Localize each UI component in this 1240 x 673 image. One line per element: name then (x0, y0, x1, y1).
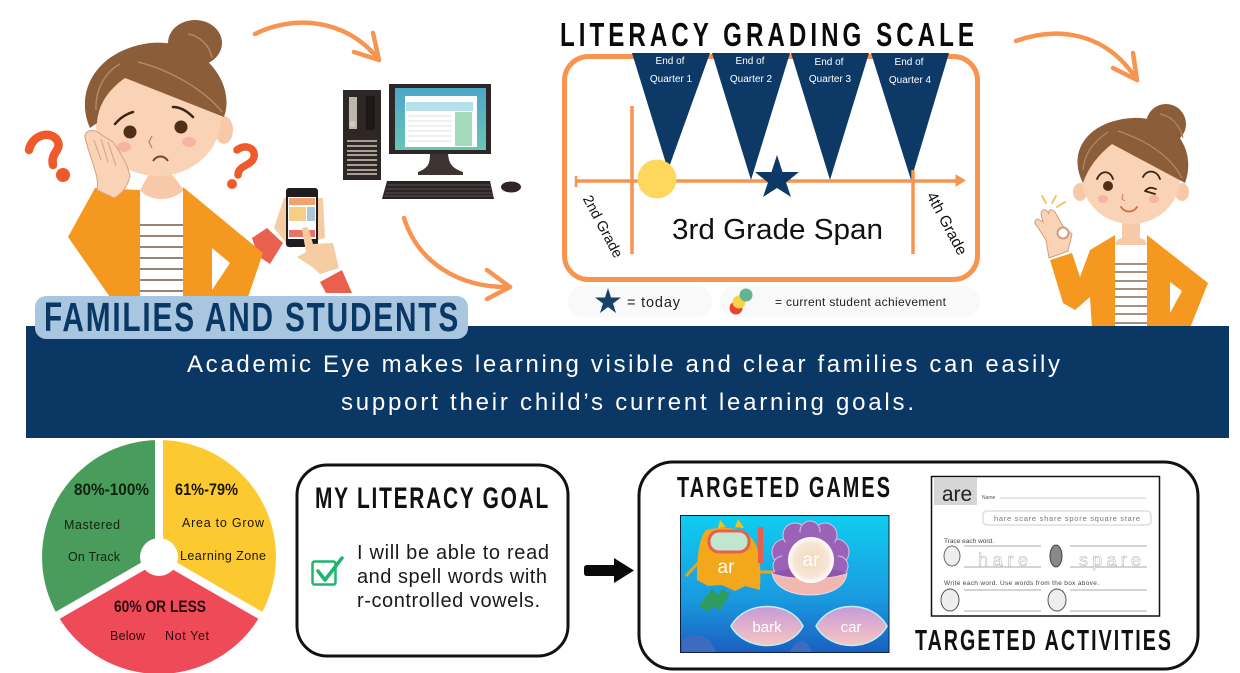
icon: green check box (312, 558, 342, 584)
quarter 2 pennant (712, 53, 790, 180)
illustration: phone in hands (274, 188, 352, 293)
hand on cheek (85, 130, 130, 198)
quarter 3 pennant: End of (815, 57, 844, 68)
OK hand gesture (1035, 196, 1072, 258)
legend: today (568, 286, 712, 317)
panel: targeted resources (639, 462, 1198, 669)
label: learning zone: Learning Zone (180, 549, 266, 563)
legend: current student achievement: = current student achievement (775, 295, 947, 309)
monster diver: ar (718, 557, 735, 578)
heading: targeted games: TARGETED GAMES (677, 472, 892, 504)
head (1073, 104, 1189, 224)
label: mastered: Mastered (64, 518, 120, 532)
quarter 1 pennant: Quarter 1 (650, 74, 693, 85)
illustration: worried parent (29, 20, 283, 300)
top clam with pearl: ar (803, 550, 820, 571)
label: 60 percent or less: 60% OR LESS (114, 597, 206, 616)
label: not yet: Not Yet (165, 629, 210, 643)
goal text: I will be able to read (357, 542, 549, 564)
clam: car (816, 606, 887, 646)
banner: key message (26, 326, 1229, 438)
game screenshot (680, 516, 889, 652)
worksheet (932, 476, 1160, 616)
quarter 4 pennant: Quarter 4 (889, 75, 932, 86)
worksheet: hare (978, 550, 1028, 570)
label: 80 to 100 percent: 80%-100% (74, 480, 149, 499)
coral (682, 635, 812, 652)
heading: my literacy goal: MY LITERACY GOAL (315, 482, 550, 515)
yellow sector (159, 440, 276, 616)
arrow: goal to resources (584, 558, 634, 583)
legend: today: = today (627, 295, 681, 311)
keyboard (382, 181, 494, 199)
label: 2nd grade: 2nd Grade (579, 193, 625, 261)
arrow: grading scale to happy parent (1016, 34, 1137, 80)
body (68, 172, 283, 300)
worksheet: are (942, 483, 972, 506)
label: 61 to 79 percent: 61%-79% (175, 480, 238, 499)
arrow: parent to computer (255, 23, 379, 60)
banner text line 2: support their child’s current learning goals. (341, 389, 914, 416)
quarter 2 pennant: Quarter 2 (730, 74, 773, 85)
illustration: happy parent (1035, 104, 1208, 328)
tower (343, 90, 381, 180)
timeline axis (576, 106, 965, 254)
quarter 1 pennant (632, 53, 710, 170)
quarter 4 pennant (871, 53, 949, 180)
monster diver (686, 519, 778, 612)
worksheet: Write each word. Use words from the box above. (944, 580, 1099, 587)
quarter 3 pennant (791, 53, 869, 180)
goal text: and spell words with (357, 566, 547, 588)
banner text line 1: Academic Eye makes learning visible and clear families can easily (187, 351, 1060, 378)
illustration: desktop computer (343, 84, 521, 199)
label: 3rd grade span: 3rd Grade Span (672, 214, 883, 246)
goal text (357, 542, 549, 612)
today star (755, 155, 799, 197)
label: on track: On Track (68, 550, 121, 564)
clam: bark (731, 606, 803, 646)
heading: literacy grading scale: LITERACY GRADING SCALE (560, 16, 978, 53)
panel: my literacy goal (297, 465, 568, 656)
quarter 2 pennant: End of (736, 56, 765, 67)
quarter 1 pennant: End of (656, 56, 685, 67)
label: area to grow: Area to Grow (182, 516, 265, 530)
worksheet: Trace each word. (944, 538, 994, 545)
quarter 3 pennant: Quarter 3 (809, 74, 852, 85)
body (1050, 218, 1208, 328)
label: 4th grade: 4th Grade (923, 189, 970, 258)
red sector (58, 557, 260, 673)
worksheet: hare scare share spore square stare (994, 514, 1140, 523)
legend: current student achievement (720, 286, 980, 317)
current achievement marker (638, 160, 676, 198)
head (85, 20, 233, 176)
top clam with pearl (772, 521, 849, 595)
arrow: computer to grading scale (404, 218, 510, 299)
chart: score pie (42, 439, 276, 673)
worksheet: spare (1079, 550, 1141, 570)
worksheet: Name (982, 495, 996, 501)
left question mark (29, 135, 66, 178)
chart: literacy grading scale timeline (564, 53, 978, 280)
green sector (42, 440, 159, 616)
monitor (389, 84, 491, 175)
quarter 4 pennant: End of (895, 57, 924, 68)
mouse (501, 182, 521, 192)
clam: bark: bark (752, 619, 782, 636)
heading: families and students: FAMILIES AND STUDENTS (44, 294, 460, 340)
right question mark (230, 147, 254, 186)
goal text: r-controlled vowels. (357, 590, 540, 612)
label: below: Below (110, 629, 146, 643)
clam: car: car (841, 619, 861, 636)
